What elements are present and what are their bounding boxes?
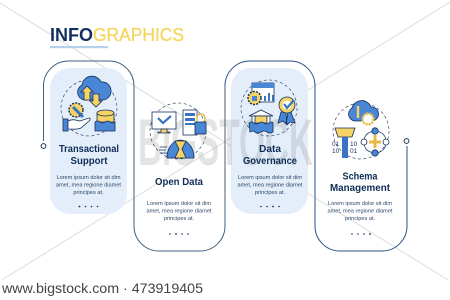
text: panel 1 description: Lorem ipsum dolor sit dim — [56, 175, 121, 181]
heading: Schema Management: Management — [330, 182, 390, 194]
panel: transactional support background — [50, 68, 127, 214]
dots: panel 3 — [260, 206, 280, 207]
heading: Transactional Support: Support — [70, 155, 108, 167]
text: panel 4 description: Lorem ipsum dolor sit dim — [328, 201, 392, 207]
title — [50, 25, 184, 48]
title: INFO — [50, 25, 93, 45]
text: panel 4 description: principes at. — [345, 216, 376, 222]
text: panel 4 description: amet, mea regione diamet — [328, 208, 393, 214]
icon: schema management: 10 — [332, 148, 340, 155]
title: GRAPHICS — [93, 25, 184, 45]
icon: data governance — [241, 80, 297, 136]
heading: Data Governance — [243, 143, 297, 167]
dots: panel 4 — [351, 233, 371, 235]
heading: Data Governance: Governance — [243, 155, 297, 167]
dots: panel 1 — [79, 206, 98, 207]
text: panel 3 description: principes at. — [255, 190, 286, 196]
text: panel 2 description: Lorem ipsum dolor sit dim — [147, 201, 211, 207]
icon: schema management — [332, 101, 389, 159]
text: panel 3 description: Lorem ipsum dolor sit dim — [238, 175, 302, 181]
text: panel 2 description: principes at. — [164, 216, 195, 222]
icon: transactional support — [61, 76, 117, 136]
connecting outline — [41, 61, 409, 251]
heading: Schema Management — [330, 170, 390, 194]
heading: Data Governance: Data — [259, 143, 281, 155]
text: panel 1 description: principes at. — [73, 190, 104, 196]
icon: open data — [150, 103, 206, 159]
text: panel 1 description: amet, mea regione diamet — [56, 182, 121, 188]
watermark url: www.bigstock.com · 473919405 — [1, 281, 203, 296]
text: panel 3 description: amet, mea regione diamet — [238, 182, 303, 188]
dots: panel 2 — [169, 233, 189, 235]
text: panel 2 description: amet, mea regione diamet — [147, 208, 212, 214]
icon: schema management: 01 — [350, 148, 358, 155]
heading: Open Data: Open Data — [155, 176, 203, 188]
panel: data governance background — [231, 68, 308, 214]
heading: Schema Management: Schema — [342, 170, 378, 182]
heading: Transactional Support — [59, 143, 119, 167]
icon: schema management: 01 — [332, 141, 340, 148]
heading: Transactional Support: Transactional — [59, 143, 119, 155]
icon: schema management: 10 — [350, 141, 358, 148]
